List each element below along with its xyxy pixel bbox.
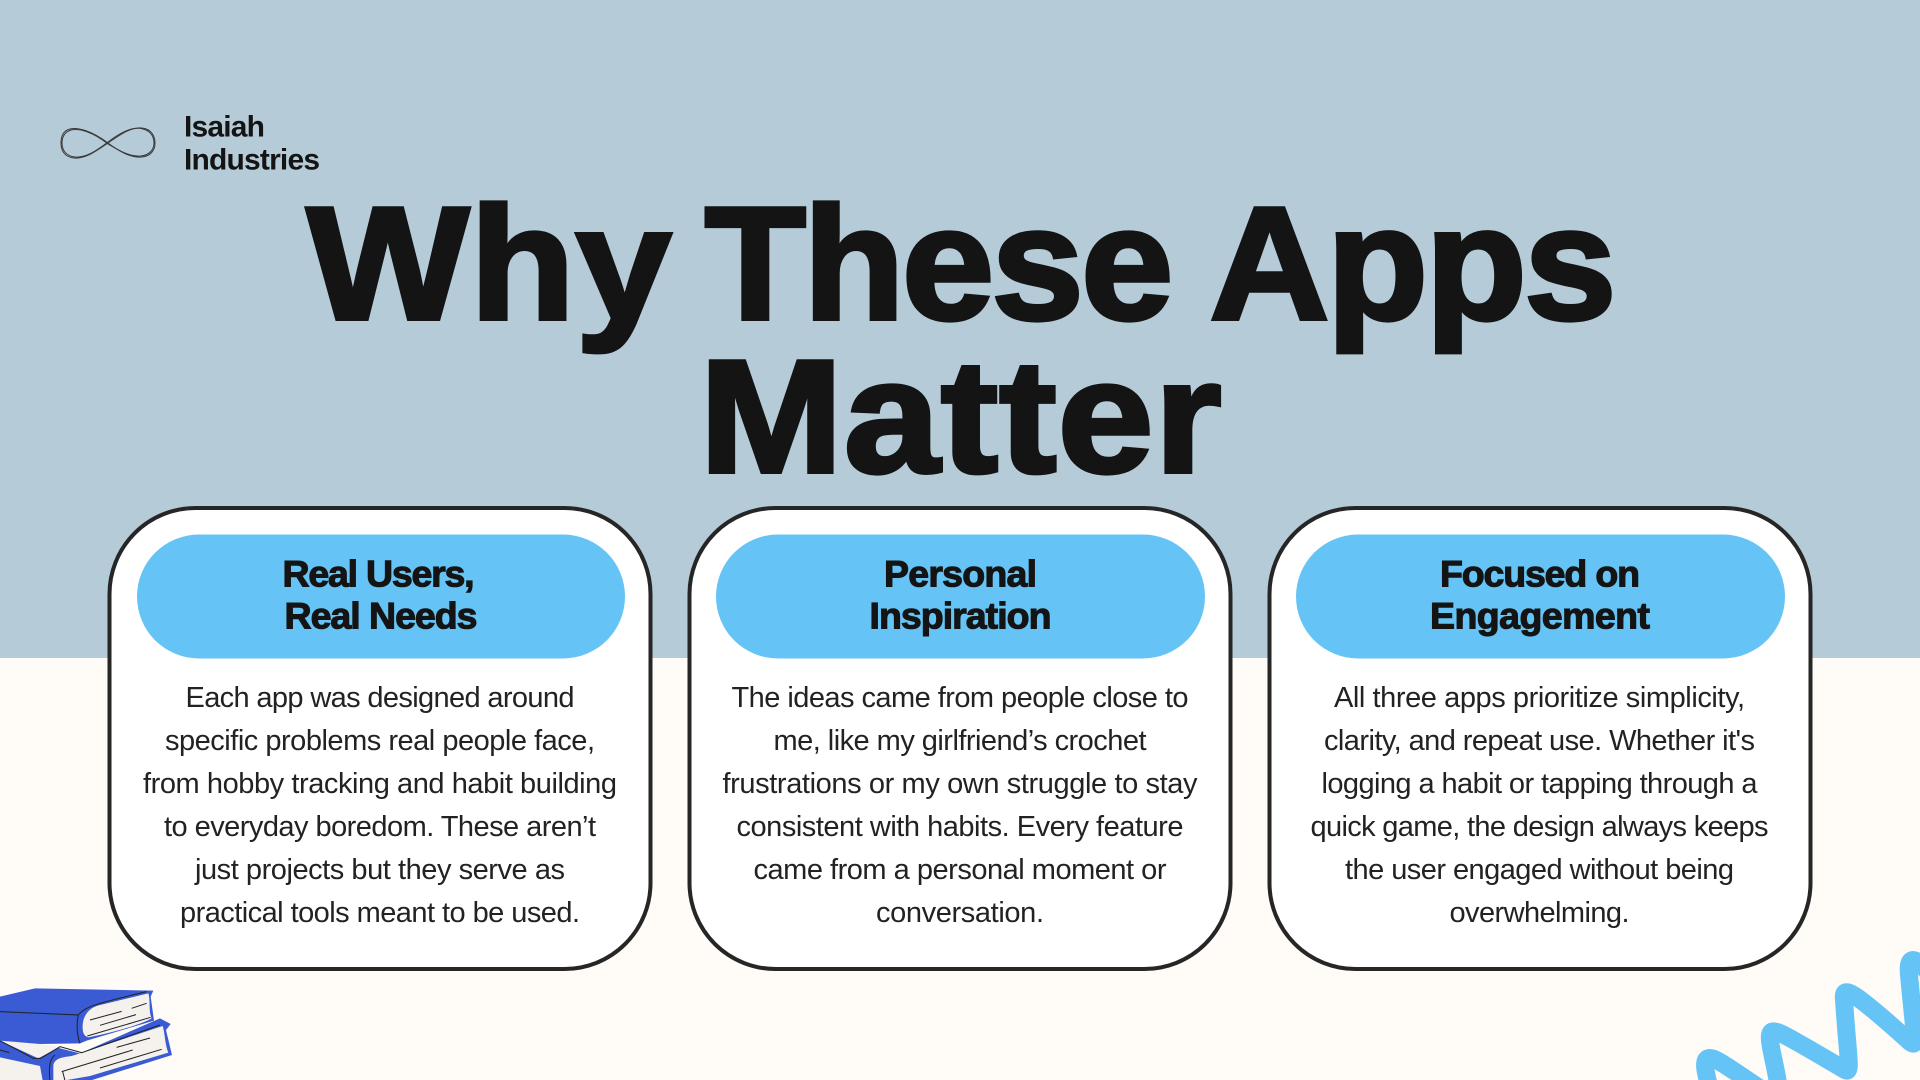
icon: infinity loop (61, 128, 155, 158)
title: Why (307, 174, 671, 354)
body text: to everyday boredom. These aren’t (164, 811, 596, 843)
pill heading: Personal (884, 552, 1037, 594)
body text: overwhelming. (1450, 897, 1630, 929)
body text: quick game, the design always keeps (1310, 811, 1768, 843)
body text: specific problems real people face, (165, 725, 595, 757)
body text: the user engaged without being (1345, 854, 1734, 886)
body text: came from a personal moment or (754, 854, 1167, 886)
pill heading (716, 534, 1205, 658)
body text: me, like my girlfriend’s crochet (774, 725, 1146, 757)
body text: clarity, and repeat use. Whether it's (1324, 725, 1755, 757)
body text: conversation. (876, 897, 1044, 929)
logo text: Industries (184, 144, 320, 176)
body text: The ideas came from people close to (732, 682, 1188, 714)
title: These (705, 173, 1173, 353)
body text: consistent with habits. Every feature (736, 811, 1184, 843)
title (307, 173, 1616, 507)
panel: Focused on Engagement (1270, 508, 1810, 969)
body text (143, 682, 617, 929)
body text: frustrations or my own struggle to stay (722, 768, 1198, 800)
pill heading: Real Needs (284, 594, 478, 636)
icon: stack of books (0, 988, 172, 1080)
logo text: Isaiah (184, 110, 265, 144)
pill heading (137, 534, 625, 658)
panel: Real Users, Real Needs (110, 508, 650, 969)
body text: from hobby tracking and habit building (143, 768, 617, 800)
body text: Each app was designed around (186, 682, 574, 714)
logo: Isaiah Industries (61, 110, 320, 176)
body text (1310, 682, 1768, 929)
body text: just projects but they serve as (194, 854, 565, 886)
body text: logging a habit or tapping through a (1322, 768, 1758, 800)
body text (722, 682, 1198, 929)
pill heading (1296, 534, 1785, 658)
icon: blue squiggle (1705, 960, 1920, 1080)
title: Matter (699, 327, 1222, 507)
pill heading: Engagement (1430, 594, 1650, 636)
lower book (0, 1018, 172, 1080)
logo text (184, 110, 320, 176)
pill heading: Focused on (1440, 552, 1640, 594)
upper book (0, 988, 154, 1044)
title: Apps (1210, 173, 1616, 353)
background: blue upper band (0, 0, 1920, 658)
pill heading: Inspiration (870, 594, 1052, 636)
body text: practical tools meant to be used. (180, 897, 580, 929)
pill heading: Real Users, (282, 552, 474, 594)
body text: All three apps prioritize simplicity, (1334, 682, 1745, 714)
panel: Personal Inspiration (690, 508, 1230, 969)
